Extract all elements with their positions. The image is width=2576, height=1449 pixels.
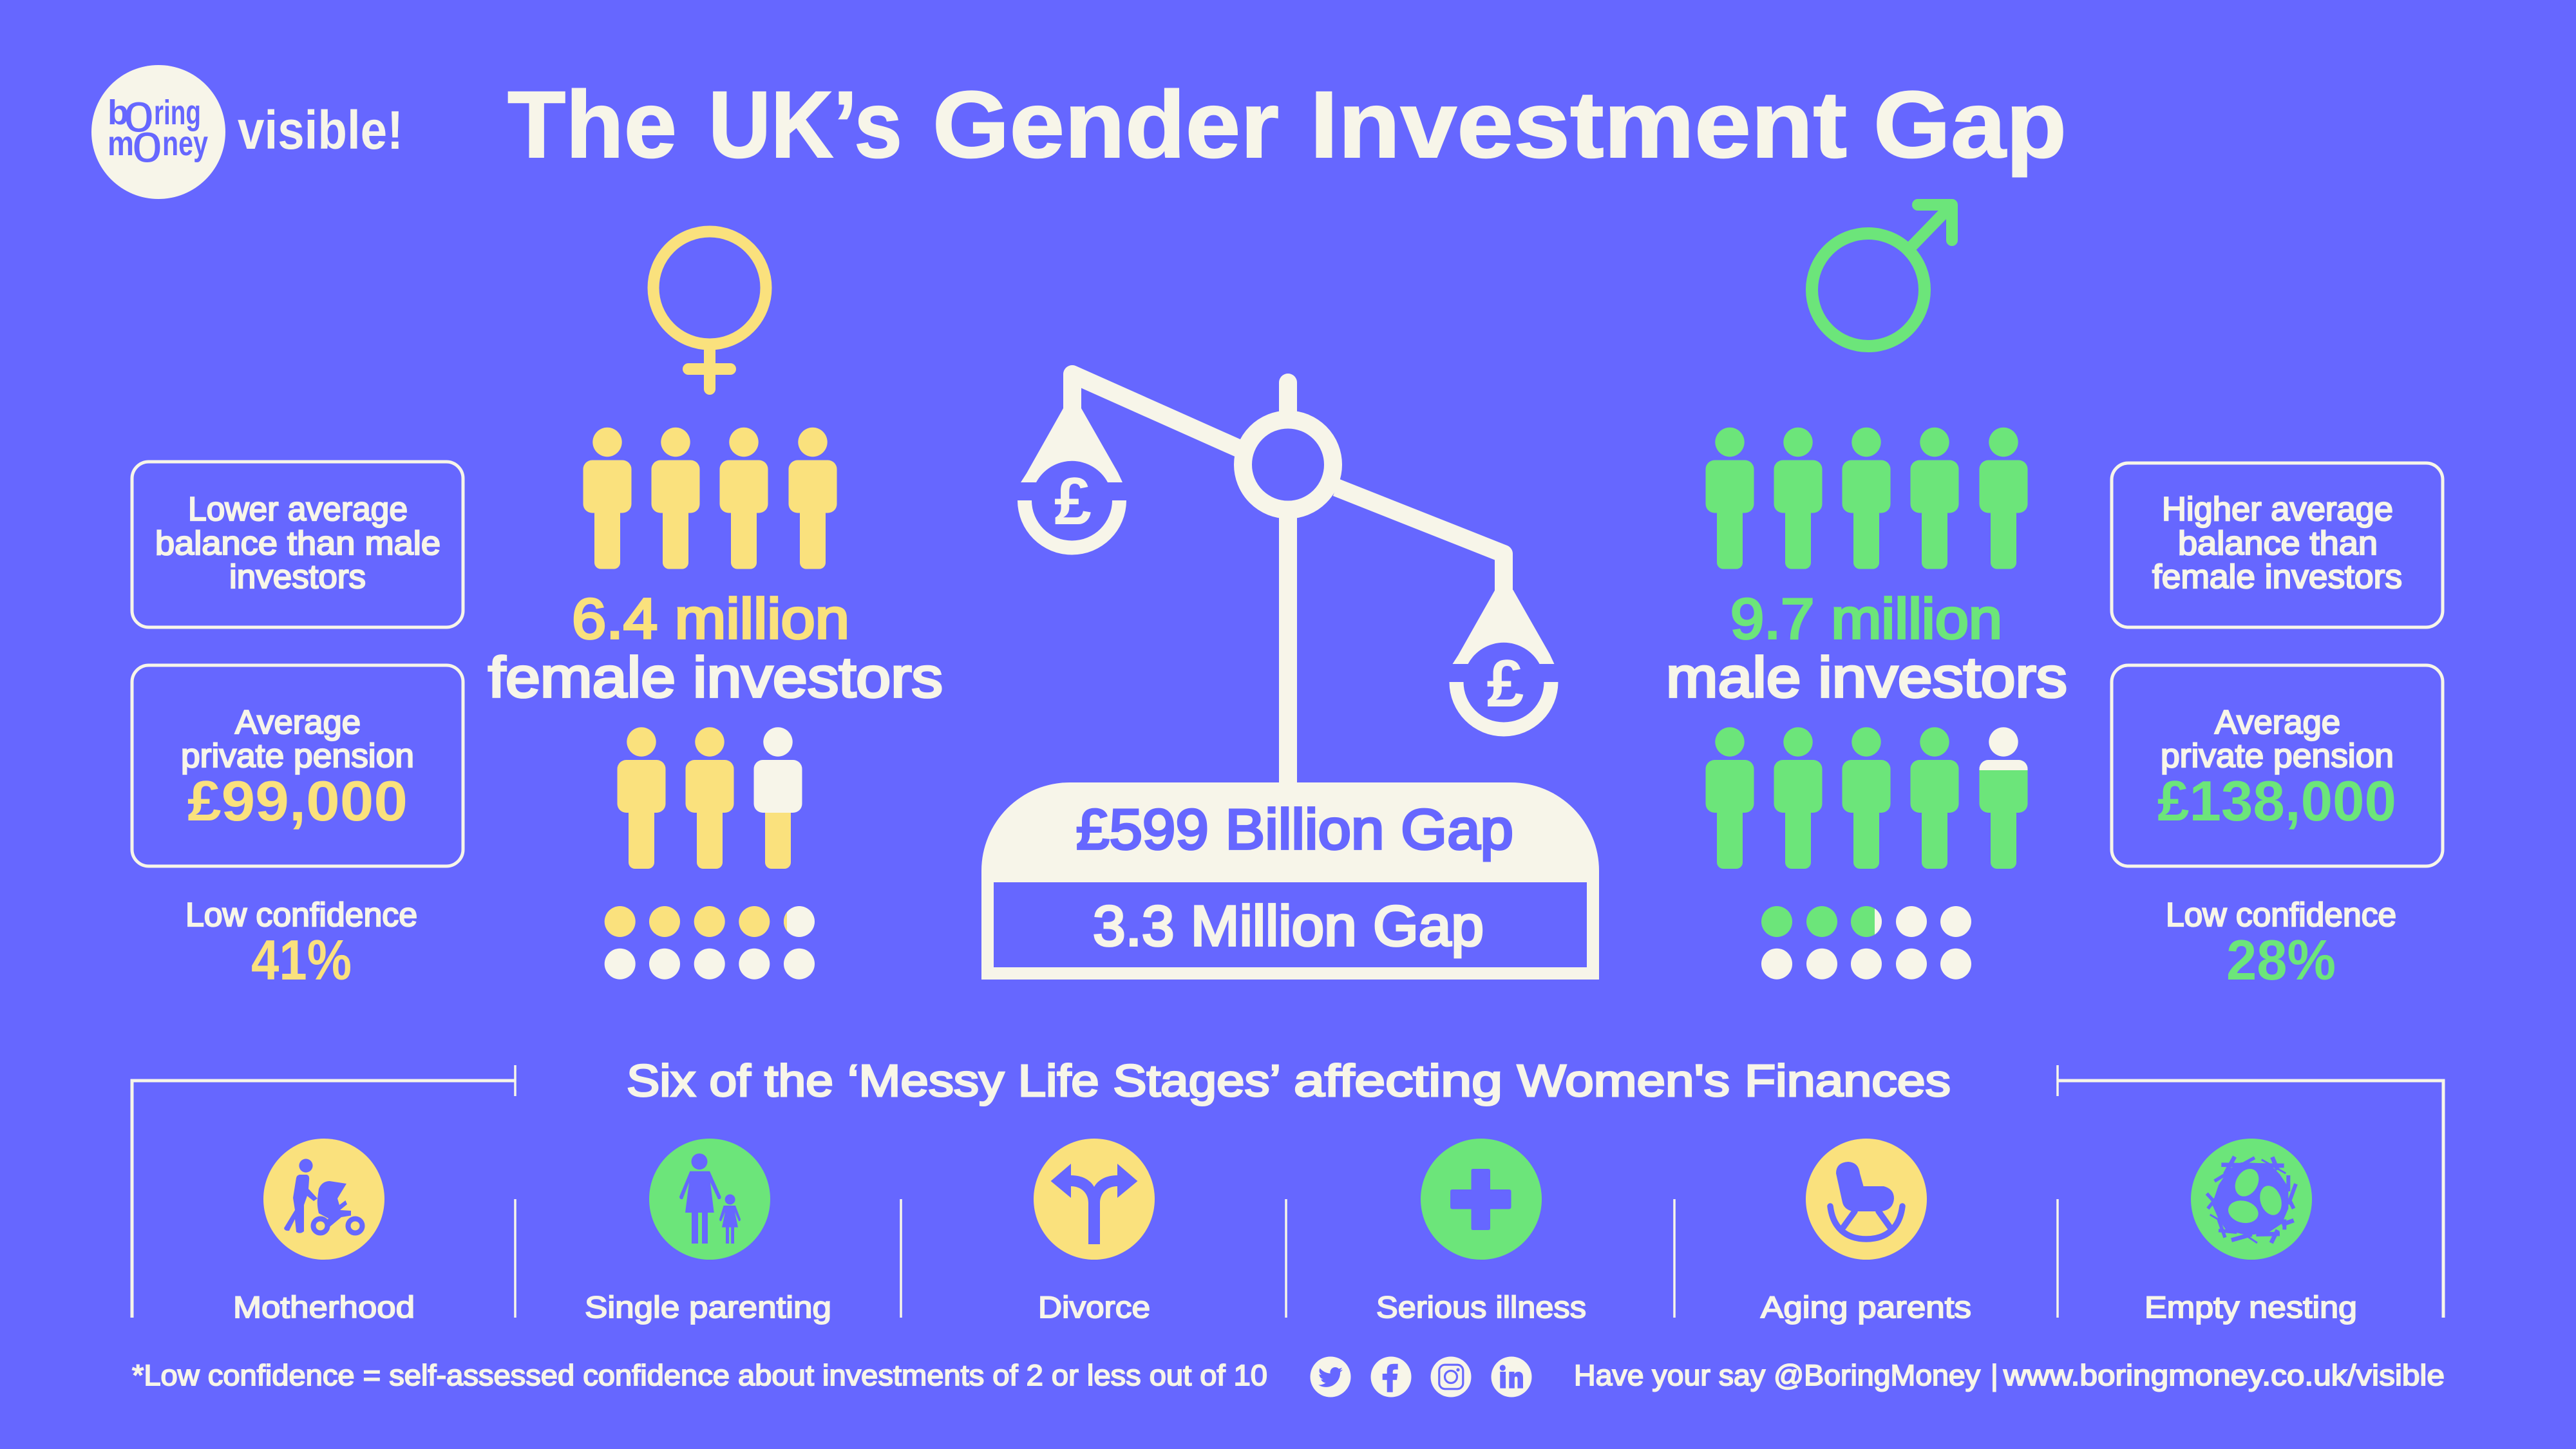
life stage: empty nesting: Empty nesting <box>2145 1290 2357 1324</box>
panel: female average pension: £99,000 <box>187 769 408 833</box>
icon: medical cross <box>1450 1169 1511 1230</box>
female low confidence figure: 41% <box>251 928 352 992</box>
female low confidence figure <box>185 896 417 992</box>
panel: higher average balance: female investors <box>2152 558 2402 596</box>
male investors count: male investors <box>1666 645 2067 709</box>
logo: boring money visible: o <box>132 113 162 173</box>
logo: boring money visible: o <box>124 82 154 143</box>
panel: lower average balance <box>132 462 463 627</box>
panel: higher average balance: Higher average <box>2162 491 2393 528</box>
title: The <box>507 72 677 178</box>
male low confidence dots <box>1761 906 1971 980</box>
female low confidence figure: Low confidence <box>185 896 417 934</box>
male people: top row <box>1705 428 2027 569</box>
bracket and dividers <box>132 1065 2443 1318</box>
panel: higher average balance <box>2112 463 2443 627</box>
life stage: divorce <box>1034 1139 1155 1324</box>
icon: facebook <box>1370 1356 1412 1397</box>
life stage: single parenting: Single parenting <box>585 1290 831 1324</box>
title: Gap <box>1873 72 2067 178</box>
male low confidence figure <box>2166 896 2396 992</box>
male low confidence figure: 28% <box>2226 928 2336 992</box>
icon: diverging arrows <box>1051 1164 1137 1244</box>
life stage: motherhood: Motherhood <box>233 1290 415 1324</box>
panel: lower average balance: Lower average <box>188 491 408 528</box>
title: UK’s <box>708 72 902 178</box>
female people: bottom row <box>617 727 802 869</box>
footer: call to action: www.boringmoney.co.uk/visible <box>2003 1359 2445 1392</box>
footer: call to action: | <box>1991 1359 1998 1392</box>
life stage: divorce: Divorce <box>1038 1290 1150 1324</box>
heading: messy life stages: ‘Messy Life Stages’ <box>848 1056 1279 1106</box>
female low confidence dots <box>605 906 815 980</box>
panel: lower average balance: investors <box>229 558 366 596</box>
logo: boring money visible: ring <box>154 93 201 132</box>
panel: male average pension: private pension <box>2161 737 2394 775</box>
heading: messy life stages: Women's <box>1517 1056 1730 1106</box>
panel: female average pension <box>132 665 463 866</box>
title: Investment <box>1310 72 1847 178</box>
logo: boring money visible: visible! <box>238 100 403 160</box>
life stage: single parenting <box>585 1139 831 1324</box>
panel: female average pension: Average <box>235 704 361 741</box>
icon: mother with stroller <box>284 1159 362 1233</box>
scale base with gap figures: 3.3 Million Gap <box>1093 894 1484 958</box>
female investors count <box>488 587 943 709</box>
title: Gender <box>933 72 1279 178</box>
scale base with gap figures <box>981 782 1599 980</box>
left pan with pound <box>1018 408 1126 555</box>
panel: male average pension: £138,000 <box>2157 769 2396 833</box>
female people: top row <box>583 428 837 569</box>
right pan with pound: £ <box>1486 647 1524 721</box>
icon: twitter <box>1310 1356 1351 1397</box>
icon: parent and child <box>679 1153 741 1244</box>
life stage: empty nesting <box>2145 1139 2357 1324</box>
life stage: serious illness <box>1376 1139 1586 1324</box>
panel: lower average balance: balance than male <box>155 525 440 562</box>
icon: female symbol <box>653 232 766 389</box>
panel: higher average balance: balance than <box>2178 525 2378 562</box>
logo: boring money visible: ney <box>162 124 208 163</box>
life stage: serious illness: Serious illness <box>1376 1290 1586 1324</box>
left pan with pound: £ <box>1054 464 1092 539</box>
panel: female average pension: private pension <box>181 737 414 775</box>
scale base with gap figures: £599 Billion Gap <box>1076 797 1513 861</box>
logo: boring money visible: b <box>108 93 129 132</box>
icon: male symbol <box>1812 205 1952 346</box>
life stage: motherhood <box>233 1139 415 1324</box>
female investors count: female investors <box>488 645 943 709</box>
footer: call to action: Have your say @BoringMoney <box>1574 1359 1981 1392</box>
icon: instagram <box>1431 1356 1471 1397</box>
male investors count <box>1666 587 2067 709</box>
logo: boring money visible <box>91 65 403 199</box>
logo: boring money visible: m <box>108 124 134 163</box>
icon: rocking chair <box>1830 1162 1902 1239</box>
heading: messy life stages: Finances <box>1745 1056 1951 1106</box>
panel: male average pension <box>2112 665 2443 866</box>
heading: messy life stages: Six of the <box>627 1056 833 1106</box>
life stage: aging parents: Aging parents <box>1761 1290 1971 1324</box>
heading: messy life stages: affecting <box>1294 1056 1502 1106</box>
panel: male average pension: Average <box>2215 704 2340 741</box>
right pan with pound <box>1449 590 1558 737</box>
life stage: aging parents <box>1761 1139 1971 1324</box>
male low confidence figure: Low confidence <box>2166 896 2396 934</box>
scales: balance illustration <box>981 374 1599 980</box>
icon: nest with eggs <box>2207 1157 2296 1243</box>
male investors count: 9.7 million <box>1730 587 2002 650</box>
scale beam and post <box>1072 374 1504 786</box>
female investors count: 6.4 million <box>572 587 849 650</box>
footnote: *Low confidence = self-assessed confidence about investments of 2 or less out of 10 <box>132 1359 1267 1392</box>
icon: linkedin <box>1492 1356 1531 1397</box>
male people: bottom row <box>1705 727 2027 869</box>
